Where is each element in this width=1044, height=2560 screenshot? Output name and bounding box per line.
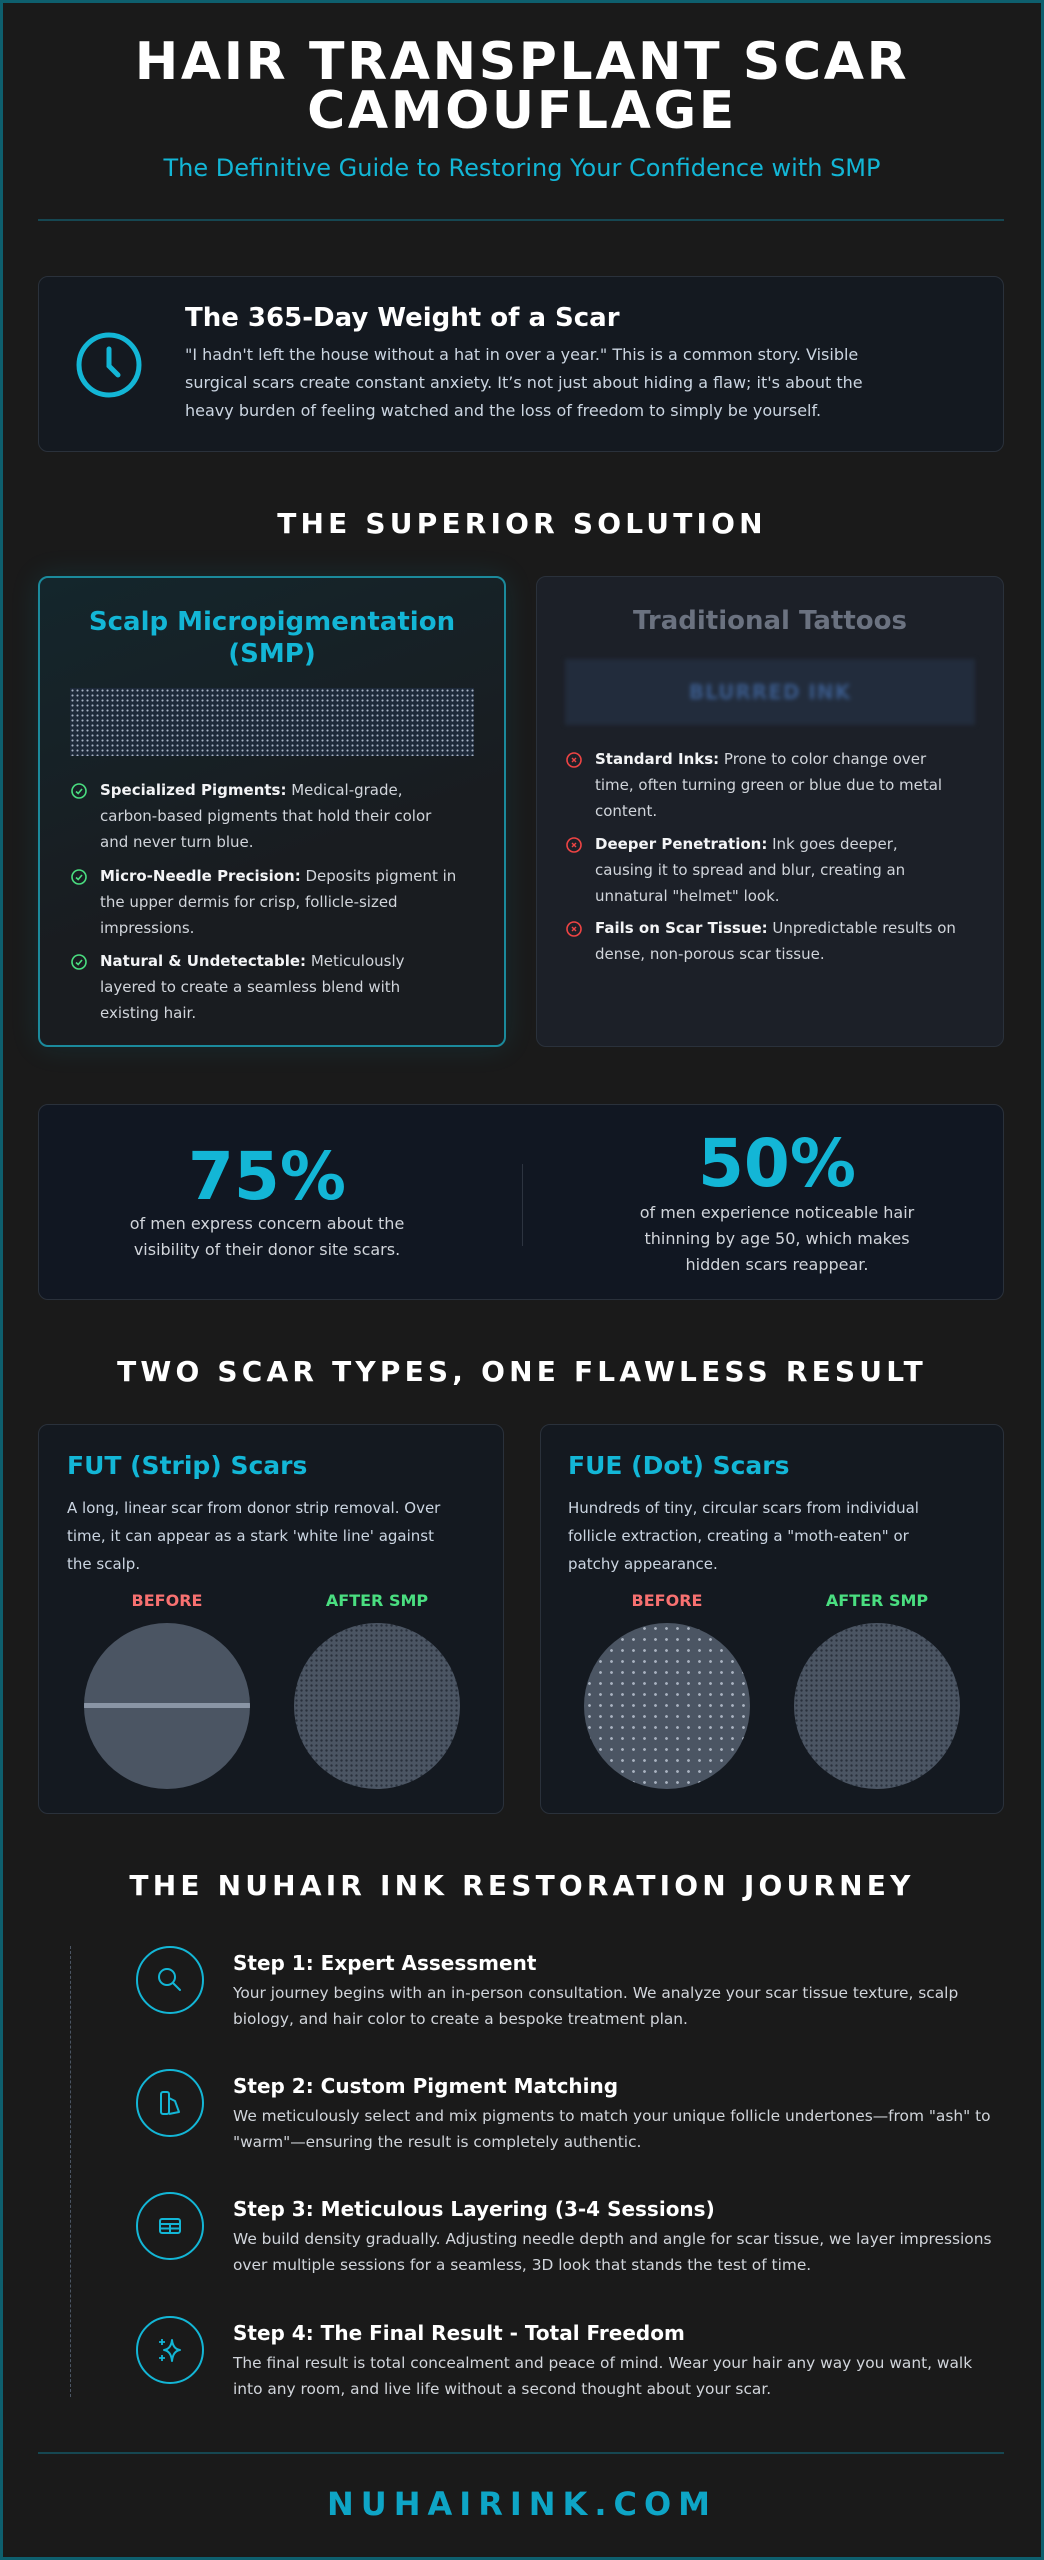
bullet: Specialized Pigments: Medical-grade, carbon-based pigments that hold their color and never turn blue.	[100, 781, 431, 851]
text block: Hundreds of tiny, circular scars from individual follicle extraction, creating a "moth-eaten" or patchy appearance.	[568, 1499, 919, 1573]
step 4	[232, 2321, 972, 2398]
step 3	[233, 2197, 992, 2274]
blurred ink: BLURRED INK	[689, 680, 851, 704]
heading: FUE (Dot) Scars	[568, 1451, 790, 1480]
heading: Traditional Tattoos	[633, 606, 907, 636]
text block: A long, linear scar from donor strip removal. Over time, it can appear as a stark 'white line' against the scalp.	[67, 1499, 440, 1573]
blurred ink	[565, 659, 975, 725]
heading: journey: THE NUHAIR INK RESTORATION JOURNEY	[129, 1869, 915, 1902]
footer: website: NUHAIRINK.COM	[327, 2485, 717, 2523]
step 1 icon: search	[136, 1946, 204, 2014]
heading: superior solution: THE SUPERIOR SOLUTION	[277, 507, 767, 540]
title: HAIR TRANSPLANT SCAR	[135, 32, 909, 92]
heading	[89, 607, 455, 669]
before circle: dot scars	[584, 1623, 750, 1789]
stat: 50%: 50%	[698, 1125, 856, 1202]
bullet: Micro-Needle Precision: Deposits pigment in the upper dermis for crisp, follicle-sized impressions.	[100, 867, 456, 937]
text block: "I hadn't left the house without a hat in over a year." This is a common story. Visible surgical scars create constant anxiety. It’s not just about hiding a flaw; it's about the heavy burden of feeling watched and the loss of freedom to simply be yourself.	[185, 345, 863, 420]
bullet: Fails on Scar Tissue: Unpredictable results on dense, non-porous scar tissue.	[595, 919, 956, 963]
step 2: We meticulously select and mix pigments to match your unique follicle undertones—from "ash" to "warm"—ensuring the result is completely authentic.	[233, 2107, 991, 2151]
stat: 75%: of men express concern about the	[130, 1214, 404, 1233]
step 2: Step 2: Custom Pigment Matching	[233, 2074, 618, 2098]
step 1	[233, 1951, 958, 2028]
timeline	[70, 1946, 992, 2398]
step 3: Step 3: Meticulous Layering (3-4 Sessions)	[233, 2197, 715, 2221]
step 4: Step 4: The Final Result - Total Freedom	[233, 2321, 685, 2345]
step 4 icon: sparkle	[136, 2316, 204, 2384]
step 1: Your journey begins with an in-person consultation. We analyze your scar tissue texture, scalp biology, and hair color to create a bespoke treatment plan.	[233, 1984, 958, 2028]
heading: Scalp Micropigmentation	[89, 607, 455, 637]
panel: traditional tattoos	[536, 576, 1004, 1047]
stat: 50%	[640, 1125, 914, 1274]
stat: 50%: of men experience noticeable hair	[640, 1203, 914, 1222]
step 2 icon: swatches	[136, 2069, 204, 2137]
heading: two scar types: TWO SCAR TYPES, ONE FLAWLESS RESULT	[117, 1355, 927, 1388]
title	[135, 32, 909, 141]
panel: FUT	[38, 1424, 504, 1814]
icon: clock	[76, 332, 142, 398]
bullet: Natural & Undetectable: Meticulously layered to create a seamless blend with existing hair.	[100, 952, 405, 1022]
stat: 50%: hidden scars reappear.	[686, 1255, 868, 1274]
stat: 50%: thinning by age 50, which makes	[644, 1229, 910, 1248]
stat: 75%: visibility of their donor site scars.	[134, 1240, 400, 1259]
step 1: Step 1: Expert Assessment	[233, 1951, 536, 1975]
subtitle: The Definitive Guide to Restoring Your Confidence with SMP	[164, 154, 880, 182]
panel: FUE	[540, 1424, 1004, 1814]
stat: 75%	[130, 1138, 404, 1259]
heading: FUT (Strip) Scars	[67, 1451, 307, 1480]
step 3 icon: layers	[136, 2192, 204, 2260]
bullet: Deeper Penetration: Ink goes deeper, causing it to spread and blur, creating an unnatural "helmet" look.	[595, 835, 905, 905]
panel: 365-day weight	[38, 276, 1004, 452]
after circle	[294, 1623, 460, 1789]
bullet: Standard Inks: Prone to color change over time, often turning green or blue due to metal content.	[595, 750, 942, 820]
heading: The 365-Day Weight of a Scar	[185, 303, 620, 333]
title: CAMOUFLAGE	[307, 81, 737, 141]
label after: AFTER SMP	[326, 1591, 428, 1610]
panel: stats	[38, 1104, 1004, 1300]
dot pattern	[70, 688, 474, 756]
step 4: The final result is total concealment and peace of mind. Wear your hair any way you want, walk into any room, and live life without a second thought about your scar.	[233, 2354, 972, 2398]
label before: BEFORE	[132, 1591, 202, 1610]
before circle: strip scar	[84, 1623, 250, 1789]
panel: SMP	[38, 576, 506, 1047]
step 3: We build density gradually. Adjusting needle depth and angle for scar tissue, we layer impressions over multiple sessions for a seamless, 3D look that stands the test of time.	[233, 2230, 992, 2274]
step 2	[233, 2074, 991, 2151]
heading: (SMP)	[228, 639, 316, 669]
label after: AFTER SMP	[826, 1591, 928, 1610]
after circle	[794, 1623, 960, 1789]
label before: BEFORE	[632, 1591, 702, 1610]
stat: 75%: 75%	[188, 1138, 346, 1215]
